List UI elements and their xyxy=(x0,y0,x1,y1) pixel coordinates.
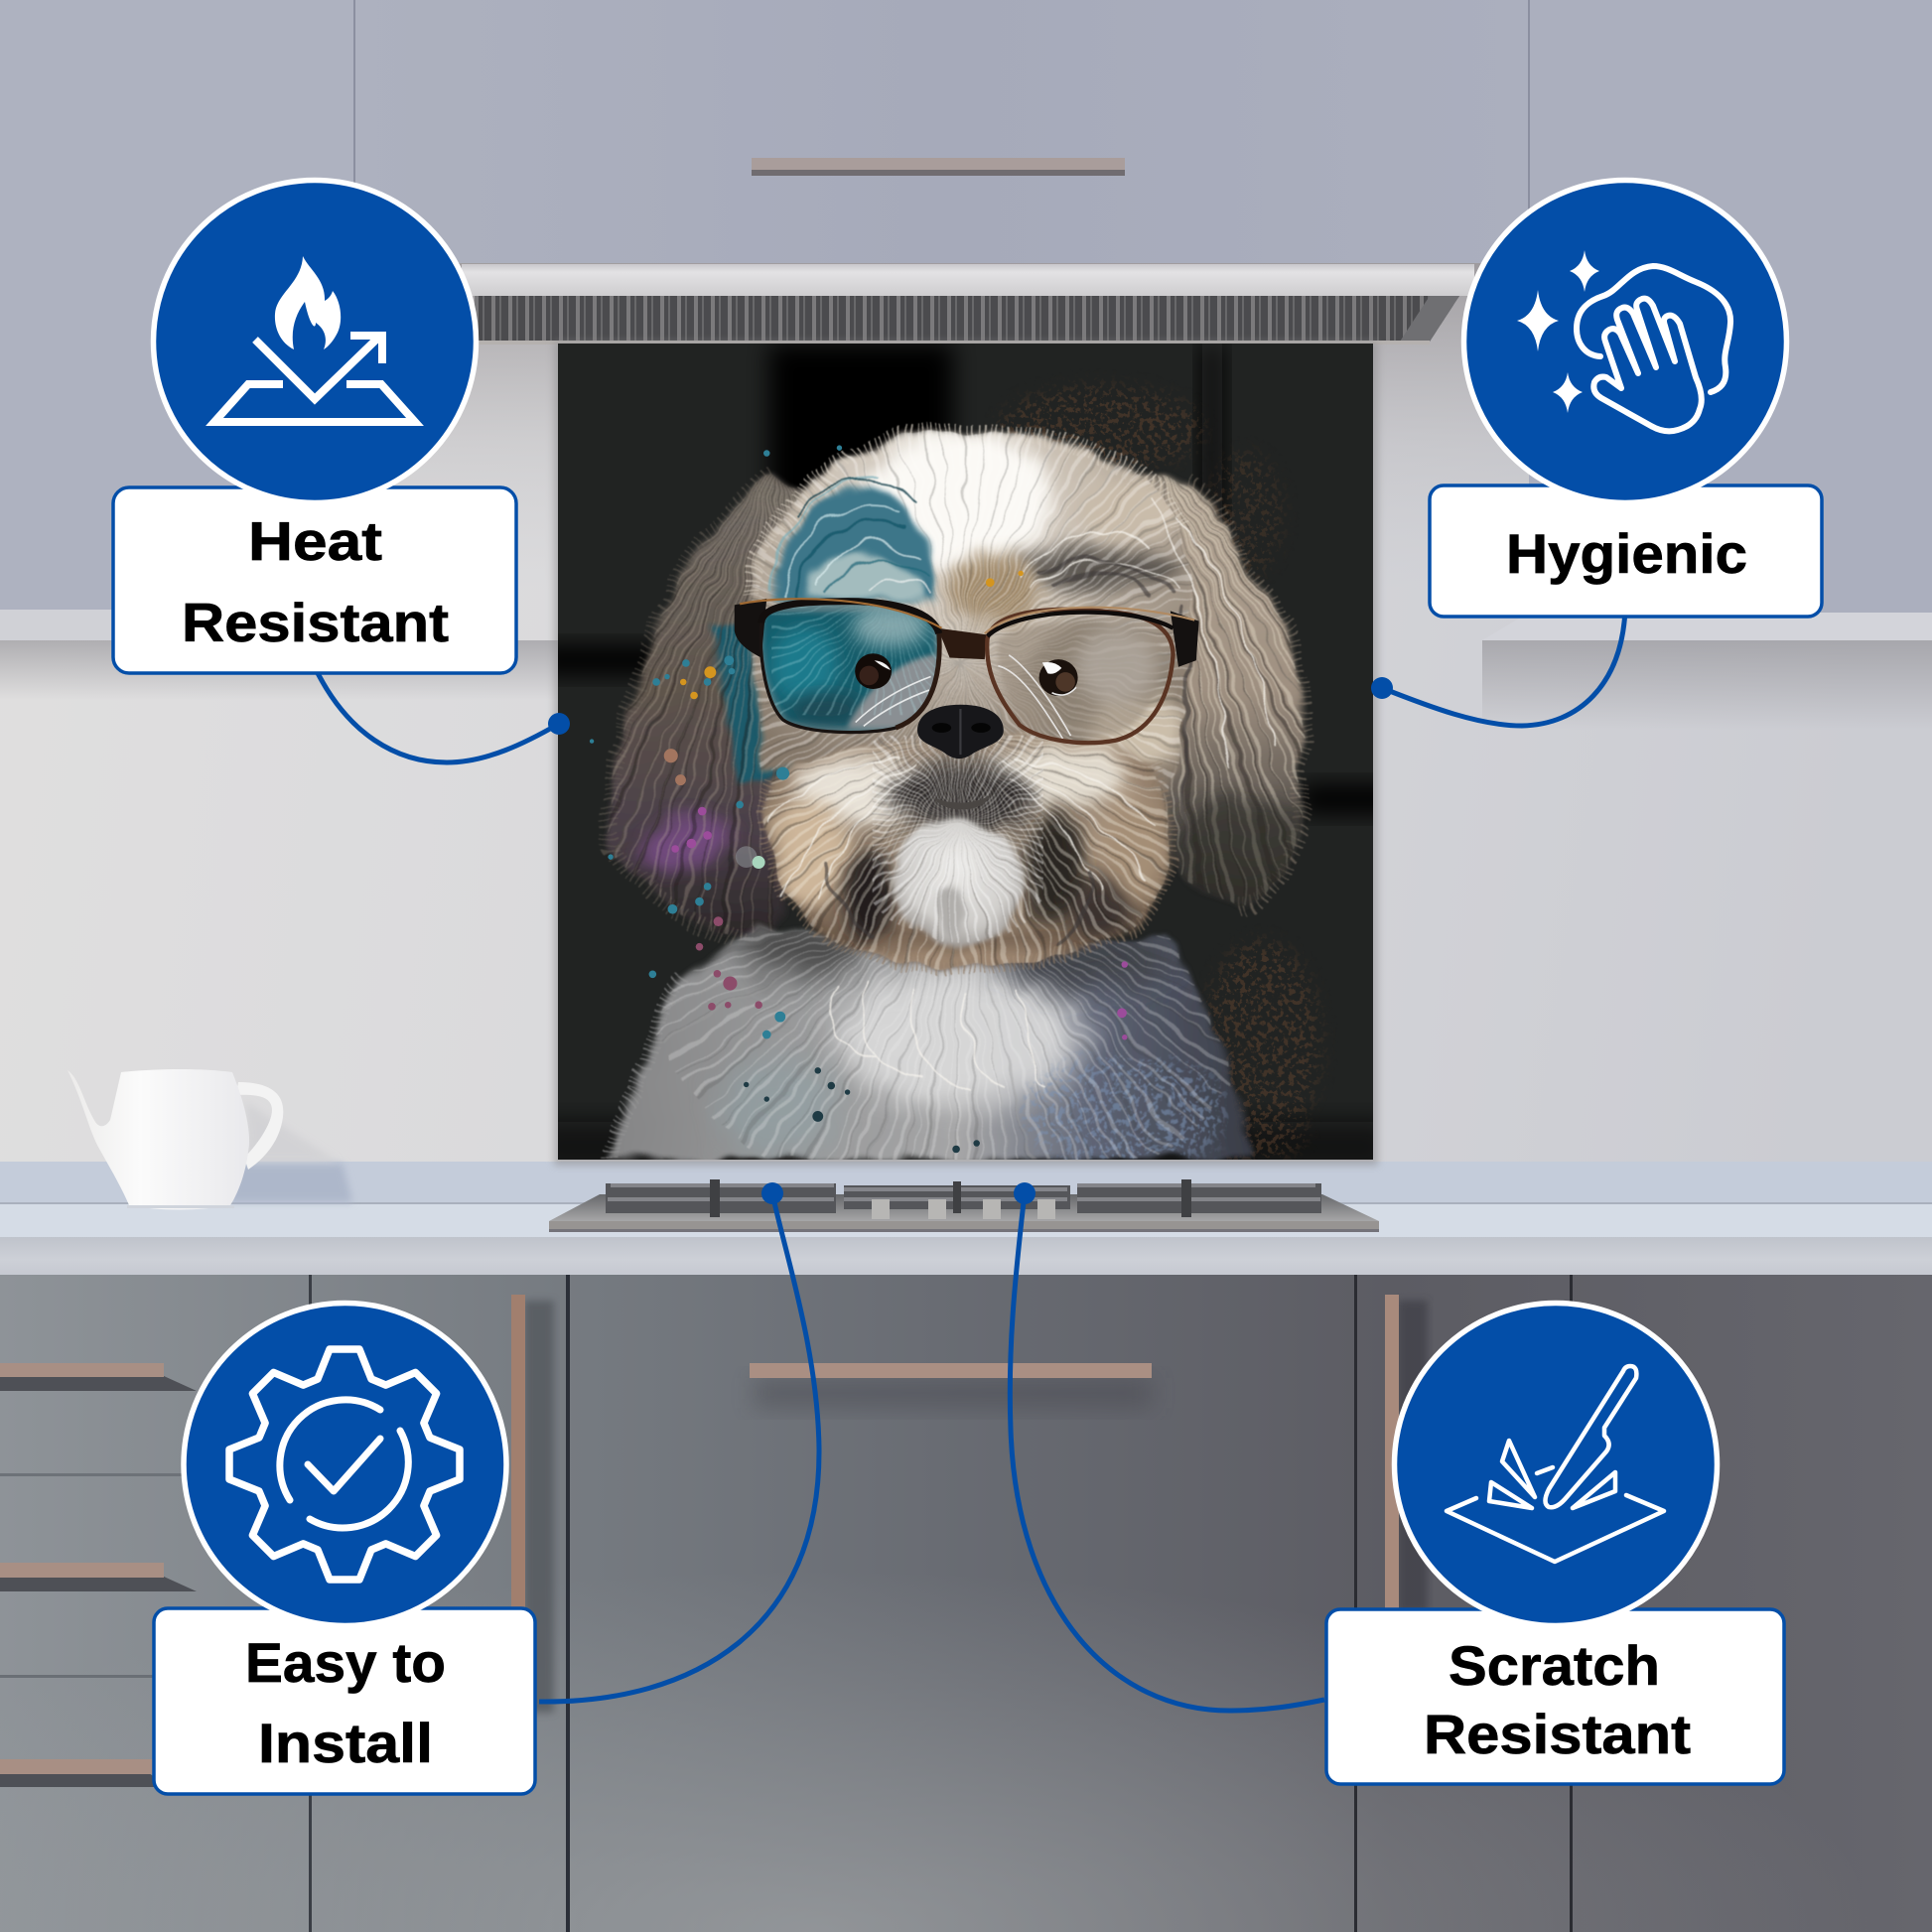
mouth xyxy=(934,795,990,809)
teapot xyxy=(68,1069,352,1209)
countertop upstand xyxy=(0,1162,1932,1204)
drawer handle 3 xyxy=(0,1759,169,1787)
callout: Heat Resistant xyxy=(113,181,570,762)
label box: heat: Heat xyxy=(248,510,382,572)
callout: Scratch Resistant xyxy=(1010,1182,1784,1784)
fur strands xyxy=(772,499,1273,1091)
drawer handle 2 xyxy=(0,1563,197,1591)
chest fur xyxy=(600,922,1255,1160)
label box: install: Easy to xyxy=(245,1631,446,1694)
centre door handle xyxy=(750,1363,1152,1408)
muzzle xyxy=(756,731,1179,977)
countertop front edge xyxy=(0,1237,1932,1275)
badge: gear icon xyxy=(184,1303,506,1626)
label box: hygienic: Hygienic xyxy=(1506,522,1747,585)
left upper cabinet xyxy=(0,0,354,610)
glass splashback panel xyxy=(512,342,1417,1172)
connector: install xyxy=(539,1182,819,1702)
right cabinet lip xyxy=(1482,613,1932,730)
teal hair patch xyxy=(772,479,935,602)
countertop surface xyxy=(0,1204,1932,1237)
label box: scratch: Scratch xyxy=(1449,1634,1660,1697)
badge: knife scratch icon xyxy=(1394,1303,1718,1626)
vertical handle right xyxy=(1385,1295,1428,1613)
extractor hood xyxy=(462,264,1474,345)
glasses xyxy=(735,599,1199,743)
gas hob xyxy=(549,1179,1379,1232)
left cabinet lip xyxy=(0,610,558,700)
label box: scratch: Resistant xyxy=(1424,1703,1691,1765)
nose xyxy=(917,705,1004,759)
connector: heat xyxy=(315,667,570,762)
illustration: dog with glasses xyxy=(590,381,1326,1160)
vertical handle left xyxy=(511,1295,554,1713)
label box: install: Install xyxy=(258,1712,433,1774)
base cabinets xyxy=(0,1275,1932,1932)
eyes xyxy=(855,653,1078,696)
right upper cabinet xyxy=(1529,0,1932,613)
label box: scratch xyxy=(1326,1609,1784,1784)
colour splatter xyxy=(590,445,1128,1153)
brown dust splatter xyxy=(998,386,1321,1161)
label box: hygienic xyxy=(1430,485,1822,617)
teal hair under lens and lens glass xyxy=(759,504,1161,739)
upper cabinet handle xyxy=(752,158,1125,176)
badge: heat icon xyxy=(153,181,477,502)
drawer handle 1 xyxy=(0,1363,197,1391)
connector: hygienic xyxy=(1371,611,1625,726)
callout: Easy to Install xyxy=(154,1182,819,1794)
right ear xyxy=(1140,472,1314,917)
glass reflections xyxy=(536,344,1400,1172)
label box: heat xyxy=(113,487,516,673)
label box: install xyxy=(154,1608,535,1794)
callout: Hygienic xyxy=(1371,181,1822,726)
connector: scratch xyxy=(1010,1182,1324,1711)
centre upper cabinet xyxy=(354,0,1529,263)
chin beard xyxy=(893,762,1024,944)
left ear xyxy=(598,467,806,945)
label box: heat: Resistant xyxy=(182,592,449,653)
badge: hygiene icon xyxy=(1463,181,1787,502)
head fur xyxy=(751,432,1191,811)
